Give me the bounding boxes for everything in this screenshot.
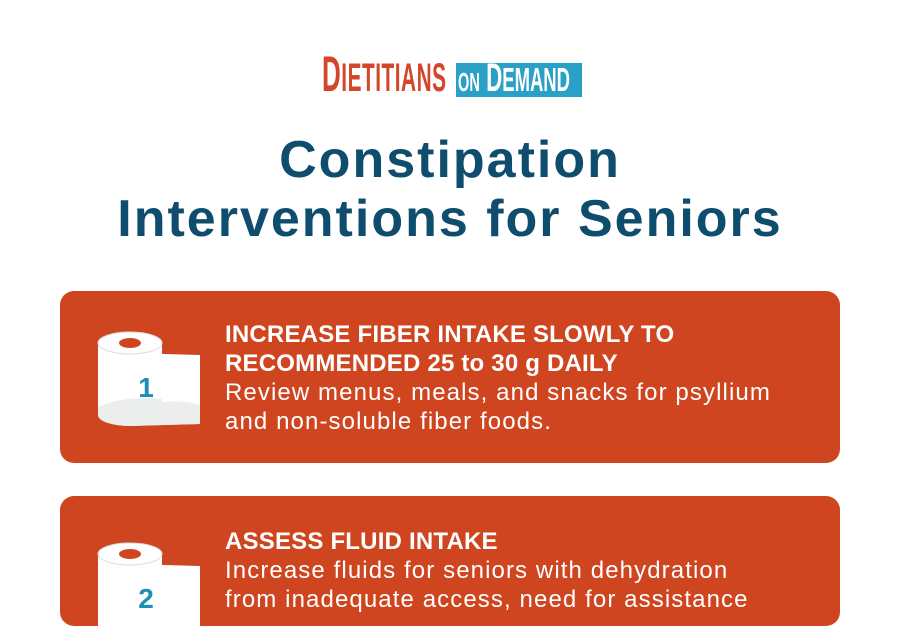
logo: ON DEMAND	[458, 56, 570, 100]
text block 1: INCREASE FIBER INTAKE SLOWLY TO	[225, 321, 674, 348]
panel: step 1	[60, 291, 840, 463]
text block 2: Increase fluids for seniors with dehydration	[225, 557, 728, 584]
text block 1: and non-soluble fiber foods.	[225, 408, 552, 435]
icon: toilet roll 1: 1	[138, 372, 154, 403]
logo: DIETITIANS	[322, 46, 447, 102]
text block 1: Review menus, meals, and snacks for psyllium	[225, 379, 771, 406]
text block 1	[225, 321, 771, 435]
icon: toilet roll 1	[98, 332, 200, 426]
title: Interventions for Seniors	[117, 190, 783, 248]
title	[117, 131, 783, 248]
text block 2: ASSESS FLUID INTAKE	[225, 528, 498, 555]
icon: toilet roll 2	[98, 542, 200, 626]
logo	[322, 46, 582, 102]
text block 2	[225, 528, 749, 613]
title: Constipation	[279, 131, 621, 189]
icon: toilet roll 2: 2	[138, 583, 154, 614]
panel: step 2	[60, 496, 840, 626]
text block 2: from inadequate access, need for assistance	[225, 586, 749, 613]
text block 1: RECOMMENDED 25 to 30 g DAILY	[225, 350, 618, 377]
